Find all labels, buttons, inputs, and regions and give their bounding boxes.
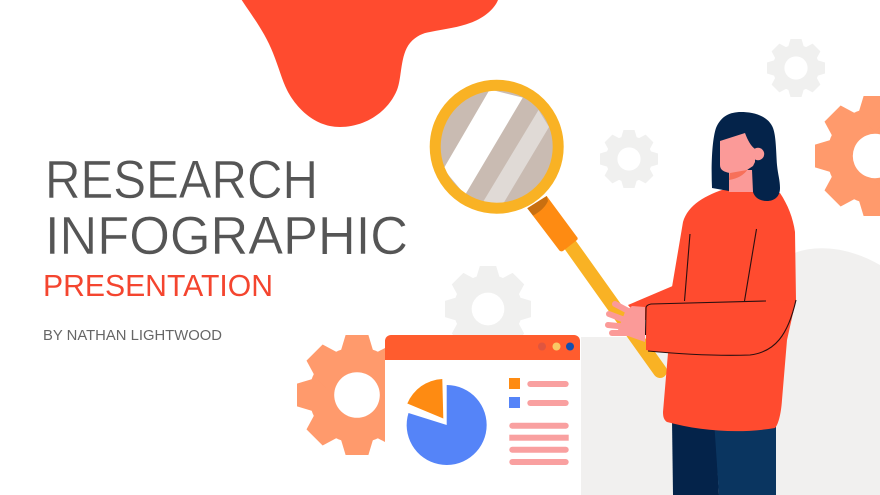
hair: [712, 112, 780, 201]
icon: grey gear top right: [767, 39, 825, 97]
subheading: presentation: PRESENTATION: [43, 268, 273, 303]
face: [720, 133, 755, 173]
icon: orange gear right: [815, 96, 880, 216]
heading: infographic: INFOGRAPHIC: [45, 206, 408, 266]
sleeve: [646, 300, 796, 355]
chin shadow: [729, 169, 748, 180]
collar shadow: [527, 196, 548, 216]
icon: grey gear middle: [600, 130, 658, 188]
ring: [435, 85, 558, 208]
collar: [527, 196, 578, 251]
handle: [571, 246, 660, 371]
sweater fold lines: [646, 229, 796, 355]
browser window chart: [385, 335, 581, 495]
back sleeve: [628, 285, 690, 320]
window buttons: [538, 342, 574, 350]
window body: [385, 355, 581, 495]
author line: BY NATHAN LIGHTWOOD: [43, 327, 222, 344]
ear: [752, 148, 764, 160]
legend: [509, 378, 569, 465]
hand: [608, 304, 645, 342]
icon: orange gear left: [297, 335, 385, 455]
lens: [440, 90, 554, 204]
sweater: [646, 188, 796, 431]
trousers: [672, 420, 776, 495]
person: [608, 112, 796, 495]
title block: [43, 150, 408, 344]
red blob: [242, 0, 498, 127]
neck: [729, 170, 753, 192]
heading: research: RESEARCH: [45, 150, 318, 210]
window header: [385, 335, 580, 360]
background hump: [581, 248, 880, 495]
icon: grey gear behind window: [445, 266, 531, 352]
pie chart: [407, 379, 487, 465]
magnifying glass: [435, 85, 660, 371]
